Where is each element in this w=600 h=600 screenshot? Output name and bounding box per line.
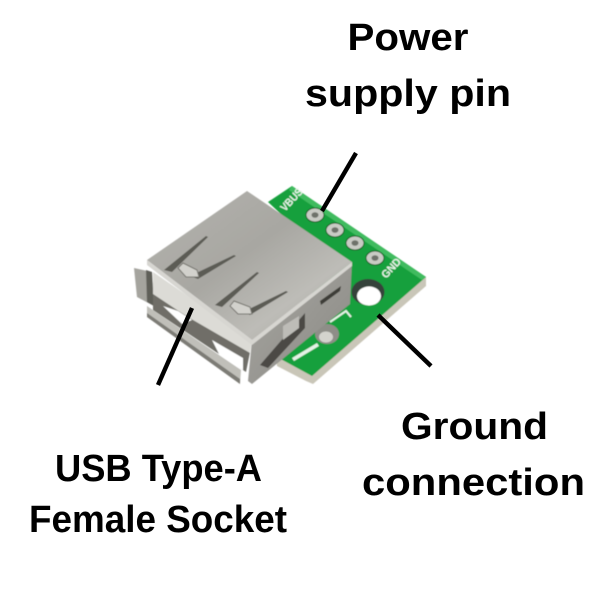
title label: power supply pin: supply pin xyxy=(305,73,511,115)
mounting hole xyxy=(352,279,384,306)
arrow: power pin leader xyxy=(322,153,356,211)
solder pads xyxy=(306,208,384,265)
dark interior xyxy=(153,290,250,372)
metal shell xyxy=(147,191,352,384)
arrow: socket leader xyxy=(158,308,192,385)
shell right side xyxy=(248,262,352,384)
spring tab right xyxy=(215,272,288,315)
PCB silk labels xyxy=(278,186,404,281)
label: USB type-A female socket: Female Socket xyxy=(29,499,287,541)
lower rail xyxy=(147,306,241,384)
shell top face xyxy=(147,191,352,340)
spring tab left xyxy=(164,236,236,279)
white windows xyxy=(163,306,192,324)
label: USB type-A female socket: USB Type-A xyxy=(55,448,262,490)
PCB silk labels: VBUS xyxy=(278,186,306,214)
label: ground connection xyxy=(362,406,585,504)
label: ground connection: connection xyxy=(362,462,585,504)
title label: power supply pin: Power xyxy=(348,17,469,59)
PCB silk labels: GND xyxy=(379,256,404,281)
USB breakout board photo illustration xyxy=(134,186,426,384)
label: USB type-A female socket xyxy=(29,448,287,541)
silk bracket xyxy=(330,311,351,322)
PCB board xyxy=(268,186,426,384)
shell side window xyxy=(260,313,305,368)
arrow: ground leader xyxy=(378,315,431,366)
label: ground connection: Ground xyxy=(401,406,548,448)
metal bracket at socket bottom xyxy=(134,268,250,384)
left flange xyxy=(134,268,154,306)
title label: power supply pin xyxy=(305,17,511,115)
solder joint xyxy=(315,324,339,344)
white plastic tongue xyxy=(153,272,252,353)
